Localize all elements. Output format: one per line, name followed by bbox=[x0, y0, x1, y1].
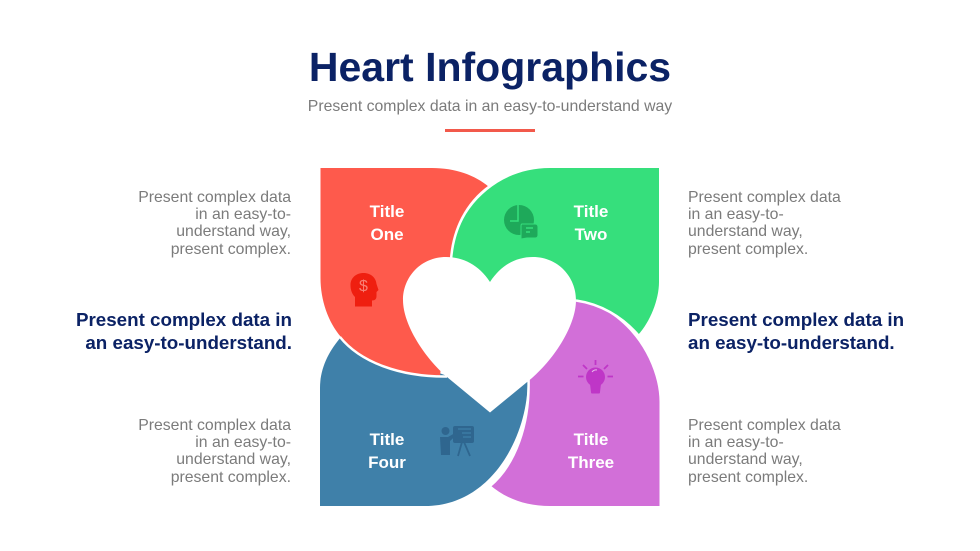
central white heart bbox=[403, 257, 576, 412]
text: top left description: in an easy-to- bbox=[195, 206, 291, 223]
text: bottom left description bbox=[138, 417, 292, 486]
text: bottom left description: Present complex data bbox=[138, 417, 291, 434]
label: title two bbox=[574, 202, 608, 244]
text: bottom right description: present complex. bbox=[688, 469, 808, 486]
title underline bbox=[445, 128, 535, 132]
text: top right description: present complex. bbox=[688, 241, 808, 258]
text: bottom right description bbox=[688, 417, 841, 486]
label: title three bbox=[568, 430, 614, 472]
text: top right description bbox=[688, 189, 841, 258]
petal: purple title three bbox=[490, 300, 660, 506]
icon: head with dollar sign: $ bbox=[359, 278, 368, 295]
text: top right description: Present complex data bbox=[688, 189, 841, 206]
label: title four bbox=[368, 430, 406, 472]
petal: red title one bbox=[320, 168, 489, 376]
text: bottom right description: in an easy-to- bbox=[688, 434, 784, 451]
icon: head with dollar sign bbox=[350, 273, 378, 306]
icon: clock and chat bubble bbox=[504, 205, 538, 239]
text: bottom right description: Present complex data bbox=[688, 417, 841, 434]
label: title four: Title bbox=[370, 430, 404, 449]
label: title three: Title bbox=[574, 430, 608, 449]
label: title three: Three bbox=[568, 452, 614, 472]
text: top left description: understand way, bbox=[176, 223, 291, 240]
text: top left description: Present complex data bbox=[138, 189, 291, 206]
white separators between petals bbox=[340, 186, 639, 486]
label: title two: Two bbox=[575, 224, 607, 244]
subtitle: Present complex data in an easy-to-understand way bbox=[308, 98, 672, 115]
icon: lightbulb with rays bbox=[578, 360, 613, 394]
title: Heart Infographics bbox=[309, 44, 671, 90]
text: middle left statement: Present complex data in bbox=[76, 309, 292, 330]
label: title four: Four bbox=[368, 452, 406, 472]
text: bottom left description: in an easy-to- bbox=[195, 434, 291, 451]
icon: presenter at board bbox=[440, 426, 474, 456]
label: title one bbox=[370, 202, 404, 244]
text: middle right statement: an easy-to-understand. bbox=[688, 332, 895, 352]
petal: green title two bbox=[451, 168, 659, 335]
text: top right description: understand way, bbox=[688, 223, 803, 240]
text: bottom left description: understand way, bbox=[176, 451, 291, 468]
text: middle left statement: an easy-to-understand. bbox=[85, 332, 292, 352]
text: top left description: present complex. bbox=[171, 241, 291, 258]
text: top left description bbox=[138, 189, 292, 258]
text: top right description: in an easy-to- bbox=[688, 206, 784, 223]
text: bottom left description: present complex. bbox=[171, 469, 291, 486]
text: middle left statement bbox=[76, 309, 292, 353]
petal: blue title four bbox=[320, 337, 528, 506]
label: title two: Title bbox=[574, 202, 608, 221]
text: middle right statement: Present complex data in bbox=[688, 309, 904, 330]
text: middle right statement bbox=[688, 309, 904, 353]
text: bottom right description: understand way, bbox=[688, 451, 803, 468]
label: title one: One bbox=[370, 224, 404, 244]
label: title one: Title bbox=[370, 202, 404, 221]
